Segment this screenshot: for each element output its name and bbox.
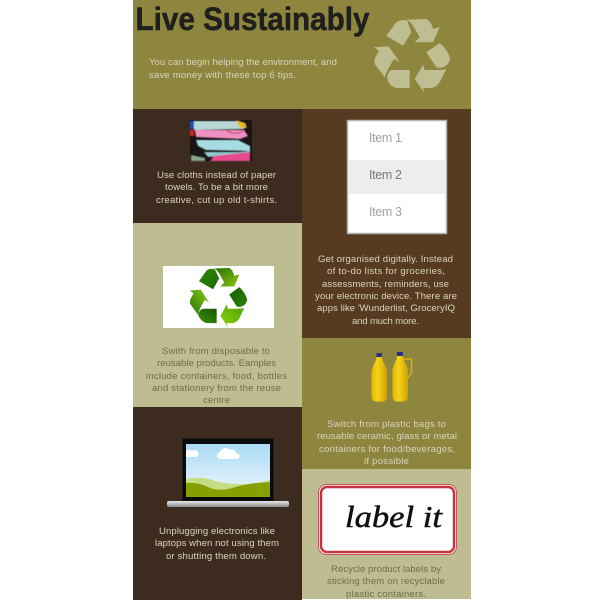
tip text: Swith from disposable to [162, 346, 270, 357]
tip text: include containers, food, bottles [146, 371, 287, 382]
panel: recycle labels tip [302, 469, 471, 600]
tip text [327, 564, 445, 600]
list widget: Item 3 [369, 205, 402, 219]
icon: recycle symbol [374, 19, 450, 93]
tip text: Recycle product labels by [331, 564, 441, 575]
tip text: laptops when not using them [155, 538, 279, 549]
panel: organise digitally tip [302, 109, 471, 338]
tip text: creative, cut up old t-shirts. [156, 195, 277, 206]
tip text [146, 346, 287, 406]
tip text: your electronic device. There are [315, 291, 457, 302]
image: label it sticker: label it [345, 499, 444, 534]
tip text [315, 254, 457, 327]
image: label it sticker [318, 484, 456, 554]
image: folded towels [190, 120, 252, 161]
tip text: Get organised digitally. Instead [318, 254, 453, 265]
tip text [317, 419, 457, 467]
tip text: containers for food/beverages, [319, 444, 455, 455]
intro text: save money with these top 6 tips. [149, 70, 296, 81]
tip text: or shutting them down. [166, 551, 266, 562]
title: Live Sustainably [136, 1, 370, 37]
tip text: apps like 'Wunderlist, GroceryIQ [317, 303, 455, 314]
list widget: Item 2 [369, 168, 402, 182]
tip text: reusable ceramic, glass or metal [317, 431, 457, 442]
tip text [155, 526, 279, 562]
tip text: and much more. [352, 316, 419, 327]
tip text [156, 170, 277, 206]
intro text [149, 57, 337, 81]
panel: unplugging electronics tip [133, 407, 302, 600]
list widget: Item 1 [369, 131, 402, 145]
tip text: Use cloths instead of paper [157, 170, 277, 181]
tip text: if possible [364, 456, 409, 467]
tip text: reusable products. Eamples [157, 358, 276, 369]
tip text: centre [203, 395, 230, 406]
panel: cloths tip [133, 109, 302, 223]
tip text: plastic containers. [346, 589, 426, 600]
tip text: of to-do lists for groceries, [327, 266, 445, 277]
panel: reusable products tip [133, 223, 302, 407]
list widget [348, 120, 446, 234]
tip text: towels. To be a bit more [165, 182, 268, 193]
image: laptop [167, 438, 289, 507]
tip text: Switch from plastic bags to [327, 419, 446, 430]
panel: reusable containers tip [302, 338, 471, 469]
tip text: assessments, reminders, use [322, 279, 449, 290]
tip text: Unplugging electronics like [159, 526, 275, 537]
tip text: sticking them on recyclable [327, 576, 445, 587]
image: green recycle symbol [163, 266, 274, 328]
panel: header [133, 0, 471, 109]
intro text: You can begin helping the environment, and [149, 57, 337, 68]
tip text: and stationery from the reuse [152, 383, 281, 394]
image: yellow bottles [372, 352, 412, 402]
